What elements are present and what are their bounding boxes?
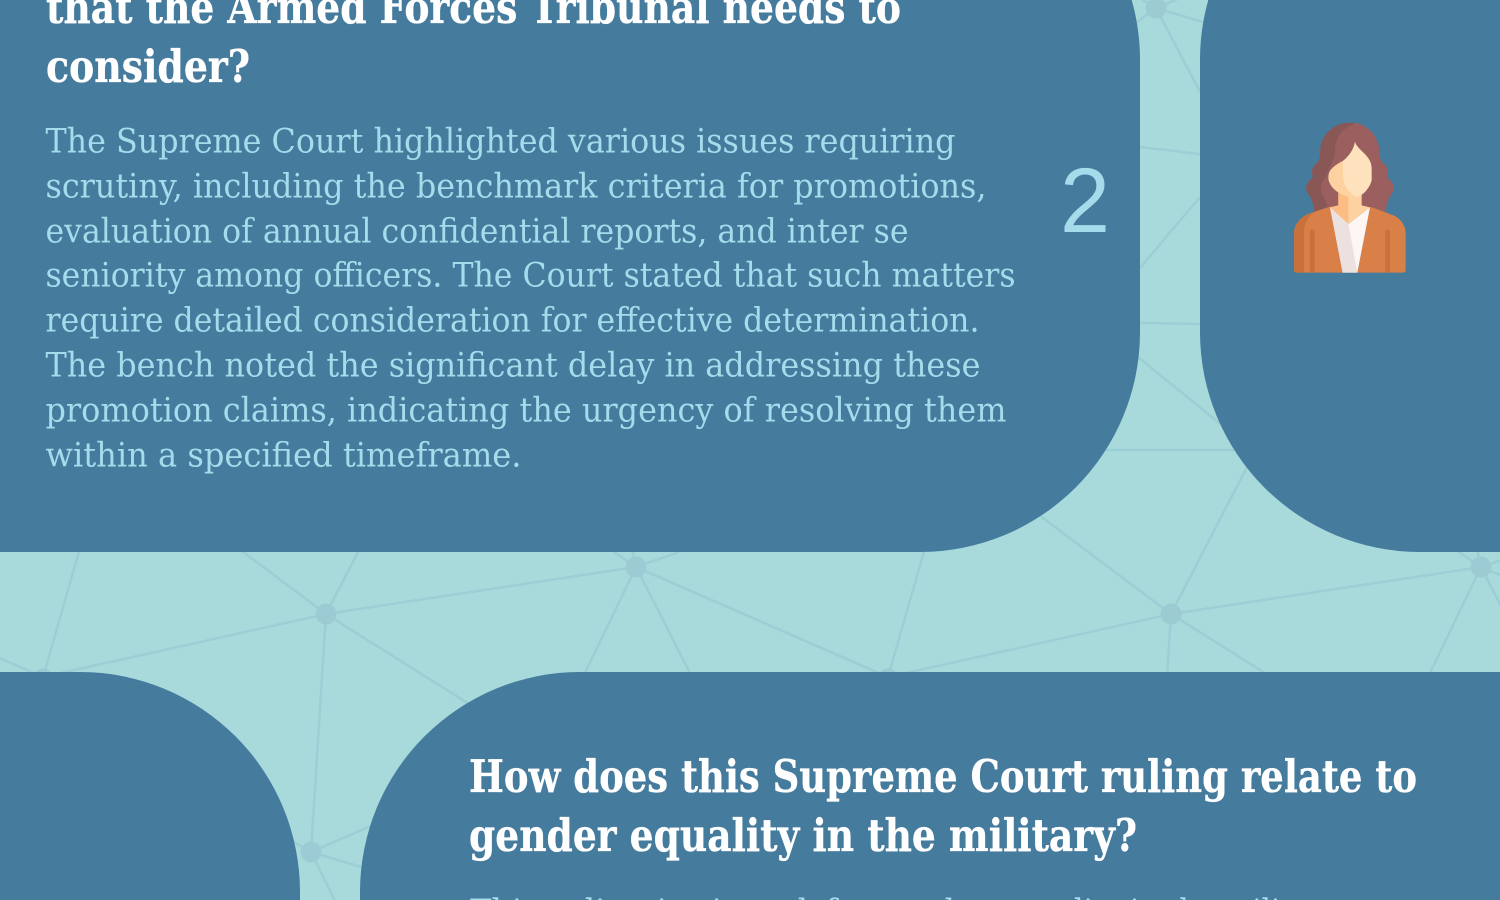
text block: question 2 answer: seniority among officers. The Court stated that such matters (46, 256, 1016, 296)
heading: question 2 (46, 0, 901, 93)
text block: question 2 answer: The bench noted the significant delay in addressing these (46, 346, 980, 386)
icon: woman in orange blazer (1294, 123, 1406, 273)
text block: question 2 answer (46, 122, 1016, 476)
text block: question 2 answer: evaluation of annual confidential reports, and inter se (46, 212, 908, 252)
panel: question 3 text (360, 672, 1500, 900)
number 2: 2 (1060, 150, 1110, 252)
heading: question 2: consider? (46, 40, 250, 93)
text block: question 2 answer: The Supreme Court highlighted various issues requiring (46, 122, 956, 162)
heading: question 3 (469, 750, 1417, 862)
text block: question 2 answer: require detailed consideration for effective determination. (46, 300, 980, 340)
panel: question 2 text (0, 0, 1140, 552)
text block: question 2 answer: scrutiny, including the benchmark criteria for promotions, (46, 166, 986, 206)
heading: question 3: gender equality in the military? (469, 809, 1137, 862)
text block: question 2 answer: promotion claims, indicating the urgency of resolving them (46, 390, 1006, 430)
panel: question 3 icon column (0, 672, 300, 900)
text block: question 2 answer: within a specified timeframe. (46, 436, 522, 476)
panel: icon column (1200, 0, 1500, 552)
text block: question 3 answer (470, 892, 1341, 900)
